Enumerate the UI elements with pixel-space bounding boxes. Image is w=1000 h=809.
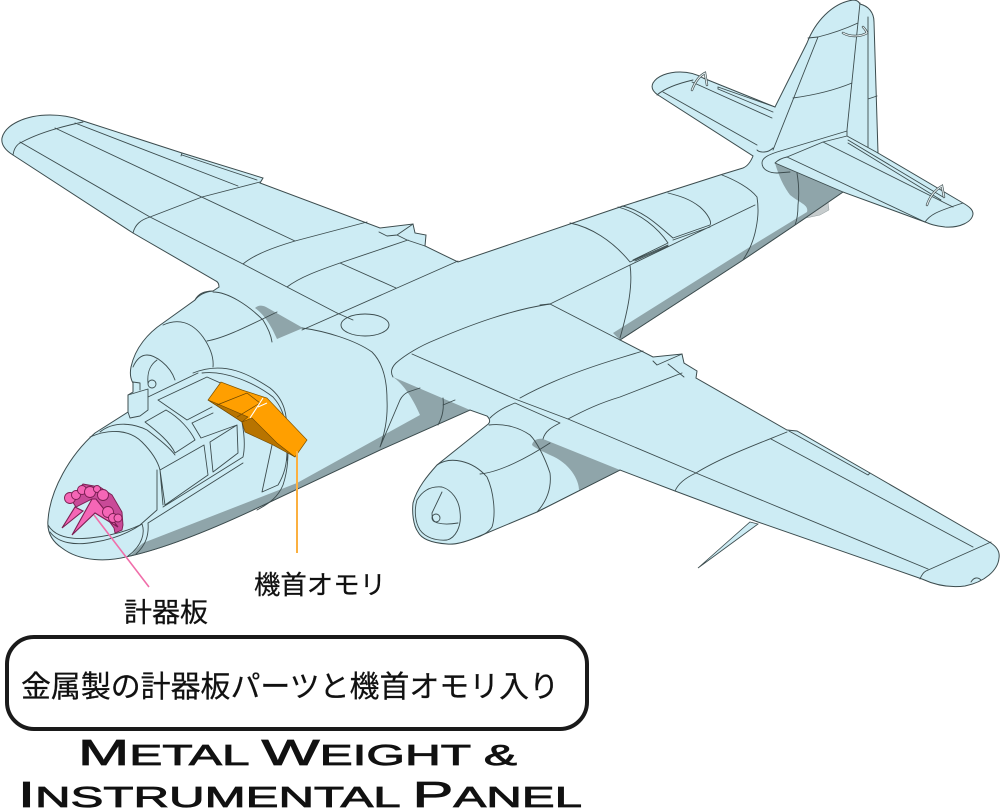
instrument panel part [62, 484, 123, 535]
nose weight underside [208, 400, 248, 422]
wing root and fuselage lines [302, 304, 550, 447]
rear fuselage shadow [613, 163, 843, 340]
right engine intake hub [432, 514, 440, 522]
tail underside grey piece [800, 202, 829, 222]
centre hatch oval [341, 314, 389, 336]
pitot tube [698, 522, 758, 568]
vertical fin lines [757, 3, 877, 173]
caption text: 金属製の計器板パーツと機首オモリ入り [21, 671, 559, 704]
caption frame [7, 637, 587, 729]
aerial fittings on tail [692, 27, 944, 205]
caption box [7, 637, 587, 729]
gauge circles [64, 486, 122, 522]
right engine shadow [532, 439, 620, 490]
fuselage shadow [130, 377, 470, 556]
nose weight dark side [242, 418, 295, 457]
nose weight part [208, 382, 307, 457]
main fin [72, 499, 118, 535]
left stabiliser lines [657, 80, 775, 145]
aerial fitting highlights [692, 27, 944, 205]
left fin [62, 507, 83, 528]
white highlight lines [250, 398, 267, 418]
left engine shadow [255, 306, 303, 339]
right wing panel lines [412, 351, 991, 582]
aircraft illustration [2, 0, 999, 587]
label: instrument panel: 計器板 [124, 598, 208, 628]
left engine intake circle [148, 380, 156, 388]
right stabiliser lines [775, 136, 963, 222]
label: nose weight: 機首オモリ [254, 570, 386, 600]
aircraft body and wings silhouette [2, 0, 999, 587]
left wing panel lines [13, 122, 458, 330]
right engine nacelle [415, 403, 560, 540]
panel upper body [70, 484, 123, 533]
nose weight inner lines [217, 393, 260, 417]
english title line 1: M ETAL W EIGHT & [78, 732, 517, 773]
leader line: weight [296, 451, 298, 553]
silhouette edges over shadow [130, 192, 843, 556]
rear fuselage panel lines [540, 173, 799, 340]
nose weight top face [208, 382, 307, 457]
nose turret [128, 382, 148, 418]
canopy frames [48, 368, 288, 556]
leader line: panel [94, 515, 149, 587]
left engine nacelle [133, 291, 277, 383]
